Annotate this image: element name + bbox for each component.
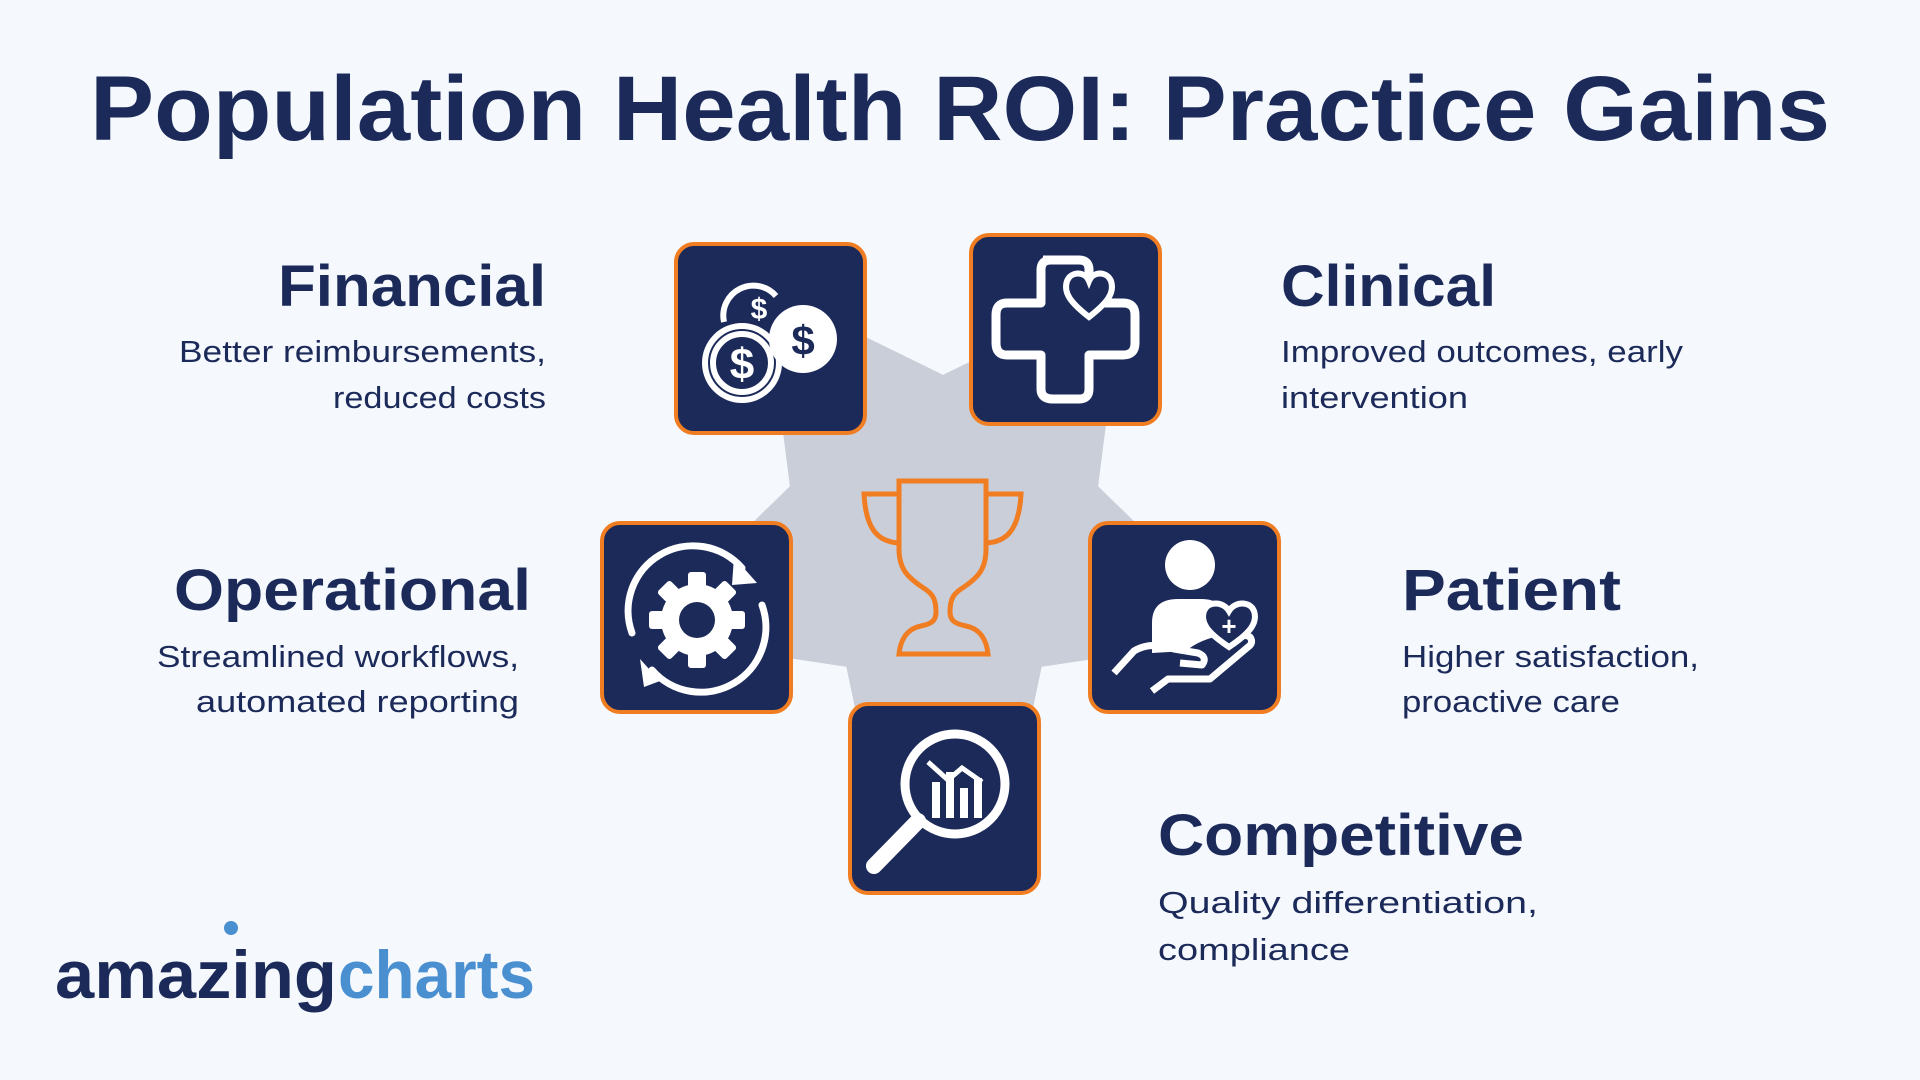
text block: clinical: intervention bbox=[1281, 380, 1468, 415]
text block: competitive bbox=[1158, 803, 1538, 967]
text block: operational: Operational bbox=[174, 558, 531, 623]
text block: patient: proactive care bbox=[1402, 684, 1620, 719]
text block: operational: automated reporting bbox=[196, 684, 519, 719]
logo: amazingcharts: charts bbox=[338, 937, 535, 1013]
text block: competitive: Quality differentiation, bbox=[1158, 885, 1538, 920]
panel: financial icon bbox=[676, 244, 865, 433]
text block: financial: Better reimbursements, bbox=[179, 334, 546, 369]
text block: financial: reduced costs bbox=[333, 380, 546, 415]
text block: financial: Financial bbox=[278, 254, 546, 319]
icon: trophy bbox=[864, 481, 1021, 654]
text block: patient: Patient bbox=[1402, 558, 1621, 623]
text block: competitive: Competitive bbox=[1158, 803, 1524, 868]
panel: financial icon: $ bbox=[751, 293, 768, 326]
panel: operational icon bbox=[602, 523, 791, 712]
text block: financial bbox=[179, 254, 546, 415]
text block: patient bbox=[1402, 558, 1699, 719]
text block: operational bbox=[157, 558, 531, 719]
logo: amazingcharts bbox=[55, 921, 535, 1013]
panel: financial icon: $ bbox=[791, 317, 815, 364]
text block: competitive: compliance bbox=[1158, 932, 1350, 967]
panel: competitive icon bbox=[850, 704, 1039, 893]
text block: clinical: Clinical bbox=[1281, 254, 1496, 319]
text block: operational: Streamlined workflows, bbox=[157, 639, 519, 674]
text block: clinical: Improved outcomes, early bbox=[1281, 334, 1684, 369]
panel: patient icon: + bbox=[1221, 611, 1237, 641]
logo: amazingcharts: amazing bbox=[55, 937, 337, 1013]
title: Population Health ROI: Practice Gains bbox=[90, 58, 1830, 160]
panel: patient icon bbox=[1090, 523, 1279, 712]
text block: patient: Higher satisfaction, bbox=[1402, 639, 1699, 674]
panel: financial icon: $ bbox=[730, 340, 754, 389]
star background bbox=[641, 291, 1247, 770]
panel: clinical icon bbox=[971, 235, 1160, 424]
text block: clinical bbox=[1281, 254, 1684, 415]
